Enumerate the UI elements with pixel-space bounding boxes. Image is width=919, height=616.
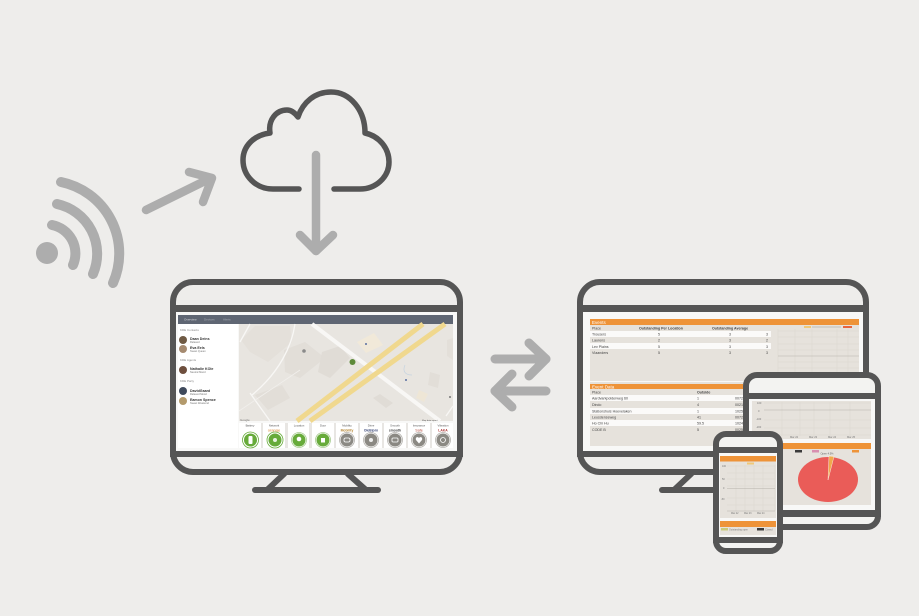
panel: event status table: Aardvarkpolderweg 60 — [592, 396, 628, 400]
panel: events table: 3 — [729, 332, 731, 336]
panel: event status table: 1025 — [735, 410, 743, 414]
sensor tiles: Door — [320, 424, 326, 428]
sensor tiles: Battery — [246, 424, 255, 428]
panel: event status table: Place — [592, 390, 601, 394]
sensor tiles: OleBjorn — [364, 428, 378, 432]
panel: events table: 3 — [729, 345, 731, 349]
panel: event status table: 0021 — [735, 403, 743, 407]
panel: events table: Laurens — [592, 338, 605, 342]
tablet line chart: Mar 24 — [828, 435, 837, 439]
panel: events table: Lev Plains — [592, 345, 609, 349]
dashboard navigation bar: Alerts — [223, 318, 231, 322]
dashboard navigation bar — [178, 315, 453, 324]
monitor: reports dashboard — [577, 282, 869, 490]
panel: events table: Events — [592, 320, 607, 325]
sensor tiles: Insurance — [413, 424, 426, 428]
icon: wifi signal — [36, 182, 119, 283]
panel: event status table: CODE B — [592, 428, 606, 432]
sidebar: device contacts: Nathalie KOle — [190, 367, 213, 371]
monitor stand — [662, 474, 780, 490]
panel: event status table: 0072 — [735, 396, 743, 400]
panel: event status table: 1024 — [735, 422, 743, 426]
panel: events table: Outstanding Average — [712, 326, 748, 330]
sensor tiles: Drive — [368, 424, 375, 428]
sensor tiles: orange — [268, 428, 281, 432]
sensor tiles: Mobility — [342, 424, 352, 428]
tablet line chart: Mar 25 — [847, 435, 856, 439]
panel: events table: Outstanding Per Location — [639, 326, 683, 330]
panel: event status table: 1 — [697, 396, 699, 400]
phone legend panel: Closed — [765, 528, 773, 532]
panel: events table: 3 — [729, 351, 731, 355]
panel: event status table — [590, 382, 753, 446]
panel: events table — [590, 319, 859, 381]
phone line chart — [720, 456, 776, 518]
panel: events table: Trousers — [592, 332, 606, 336]
phone line chart: Mar 23 — [744, 512, 752, 515]
sensor tiles: Safe — [415, 428, 423, 432]
monitor: map dashboard — [170, 282, 463, 490]
panel: event status table: 0072 — [735, 416, 743, 420]
sidebar: device contacts: Sweet Weekend — [190, 401, 209, 405]
map: Google — [240, 418, 250, 422]
tablet frame — [743, 375, 881, 527]
map: Map data report — [422, 419, 438, 422]
sensor tiles: Smooth — [390, 424, 400, 428]
tablet pie chart panel — [752, 443, 871, 505]
sidebar: device contacts: KDE Party — [180, 379, 195, 383]
panel: events table: Vlaanders — [592, 351, 608, 355]
sidebar: device contacts: Relaxed Mood — [190, 392, 207, 396]
phone line chart: Mar 22 — [731, 512, 739, 515]
sidebar: device contacts: DavidGaard — [190, 389, 210, 393]
panel: event status table: Outside — [697, 390, 710, 394]
monitor frame — [577, 282, 869, 472]
panel: events table: 3 — [729, 338, 731, 342]
dashboard navigation bar: Overview — [184, 318, 197, 322]
panel: event status table: 0025 — [735, 428, 743, 432]
phone line chart: 100 — [722, 465, 727, 468]
tablet line chart — [752, 401, 871, 439]
panel: event status table: 5 — [697, 428, 699, 432]
tablet — [743, 375, 881, 527]
sensor tiles: LAKA — [438, 428, 448, 432]
phone frame — [713, 434, 783, 551]
panel: event status table: Dindo — [592, 403, 601, 407]
panel: event status table: Ho Chi Hu — [592, 422, 609, 426]
arrows: two-way data exchange — [495, 343, 546, 407]
sidebar: device contacts: KDE Contacts — [180, 328, 199, 332]
icon: cloud — [243, 92, 389, 189]
sidebar: device contacts: Eva Eels — [190, 346, 205, 350]
panel: event status table: Event Data — [592, 384, 615, 390]
line chart: events — [778, 326, 859, 375]
tablet line chart: 100 — [757, 401, 762, 405]
sensor tiles: Location — [294, 424, 305, 428]
tablet line chart: -200 — [756, 425, 762, 429]
tablet line chart: -300 — [756, 432, 762, 436]
panel: events table: 3 — [766, 332, 768, 336]
tablet line chart: 0 — [758, 409, 760, 413]
dashboard navigation bar: Devices — [204, 318, 215, 322]
monitor stand — [255, 474, 378, 490]
panel: events table: 5 — [658, 332, 660, 336]
sensor tiles: Mobility — [341, 428, 354, 432]
phone — [713, 434, 783, 551]
phone legend panel — [720, 521, 776, 535]
panel: events table: 2 — [766, 338, 768, 342]
sensor tiles — [239, 423, 453, 448]
arrow: wifi to cloud — [146, 172, 212, 210]
panel: events table: 5 — [658, 345, 660, 349]
tablet line chart: -100 — [756, 417, 762, 421]
panel: event status table: Leusdenseweg — [592, 416, 616, 420]
panel: event status table: 4 — [697, 403, 699, 407]
panel: event status table: 59.5 — [697, 422, 704, 426]
sensor tiles: Network — [269, 424, 280, 428]
sidebar: device contacts: Eamon Spence — [190, 398, 216, 402]
sidebar: device contacts: KDE Agents — [180, 358, 197, 362]
tablet line chart: Mar 23 — [809, 435, 818, 439]
sensor tiles: smooth — [389, 428, 401, 432]
phone line chart: -50 — [721, 498, 725, 501]
monitor frame — [170, 282, 463, 472]
sensor tiles: Vibration — [438, 424, 449, 428]
sidebar: device contacts: Neutral Mood — [190, 370, 206, 374]
phone line chart: 0 — [723, 487, 725, 490]
sidebar: device contacts: Daan Deins — [190, 337, 210, 341]
tablet line chart: Mar 22 — [790, 435, 799, 439]
arrow: cloud to monitor — [300, 155, 333, 251]
sidebar: device contacts: Sweet Queen — [190, 349, 206, 353]
phone line chart: Mar 24 — [757, 512, 765, 515]
phone line chart: 50 — [722, 478, 725, 481]
tablet pie chart panel: Open 4.5% — [821, 452, 834, 456]
panel: events table: 2 — [658, 338, 660, 342]
panel: events table: 3 — [766, 351, 768, 355]
panel: event status table: Stationshuis Hoevelaken — [592, 410, 632, 414]
panel: event status table: 1 — [697, 410, 699, 414]
panel: events table: 5 — [658, 351, 660, 355]
pie chart — [798, 456, 858, 502]
sidebar: device contacts — [178, 324, 238, 448]
panel: events table: Place — [592, 326, 601, 330]
sidebar: device contacts: Relaxed — [190, 340, 200, 344]
map — [239, 324, 453, 422]
panel: event status table: 41 — [697, 416, 701, 420]
panel: events table: 3 — [766, 345, 768, 349]
phone legend panel: Outstanding open — [729, 528, 749, 532]
